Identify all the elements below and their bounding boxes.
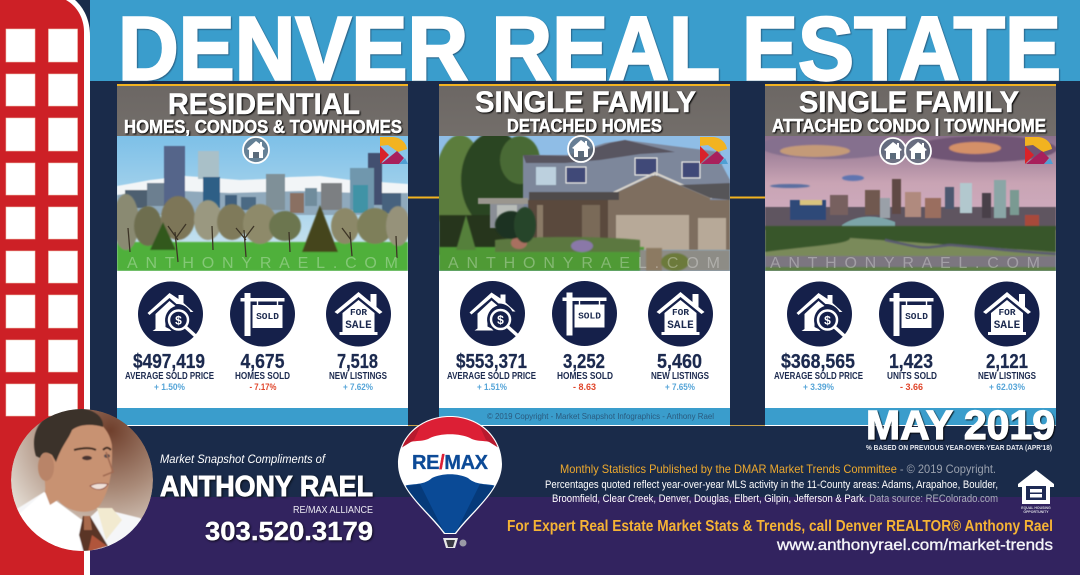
- icon: single house badge: [568, 136, 594, 162]
- stat: average sold price: + 1.51%: [477, 382, 507, 392]
- panel 3 frame: [765, 84, 1056, 426]
- stat: new listings: 5,460: [657, 351, 702, 373]
- stat: homes sold: 4,675: [240, 351, 284, 373]
- stat: new listings: FOR: [350, 307, 367, 318]
- panel 1 heading: [124, 88, 402, 137]
- panel 1 heading: HOMES, CONDOS & TOWNHOMES: [124, 117, 402, 137]
- watermark: ANTHONYRAEL.COM: [448, 255, 720, 272]
- stat: new listings: [648, 282, 713, 392]
- panel 1 frame: [117, 84, 408, 426]
- stat: average sold price: [774, 282, 863, 392]
- portrait photo: [11, 408, 155, 560]
- icon: DMAR logo: [700, 137, 728, 164]
- icon: single house badge: [243, 137, 269, 163]
- stat: average sold price: $: [175, 314, 182, 328]
- copyright line: © 2019 Copyright - Market Snapshot Infographics - Anthony Rael: [487, 411, 714, 421]
- stat: new listings: NEW LISTINGS: [978, 371, 1036, 382]
- stat: new listings: [326, 282, 391, 392]
- stat: average sold price: $497,419: [133, 351, 205, 373]
- watermark: ANTHONYRAEL.COM: [770, 255, 1040, 272]
- panel 2 frame: [439, 84, 730, 426]
- stat: homes sold: SOLD: [578, 310, 601, 322]
- stat: homes sold: HOMES SOLD: [235, 371, 290, 382]
- stat: average sold price: AVERAGE SOLD PRICE: [774, 371, 863, 382]
- stat: units sold: - 3.66: [900, 382, 923, 392]
- icon: DMAR logo: [380, 137, 408, 164]
- stat: average sold price: + 3.39%: [803, 382, 834, 392]
- stat: new listings: FOR: [672, 307, 689, 318]
- panel 2 heading: SINGLE FAMILY: [475, 86, 696, 119]
- stat: average sold price: $368,565: [781, 351, 855, 373]
- stat: new listings: FOR: [998, 307, 1016, 318]
- watermark: ANTHONYRAEL.COM: [127, 255, 398, 272]
- icon: equal housing opportunity: OPPORTUNITY: [1023, 510, 1049, 514]
- stat: homes sold: [552, 281, 617, 392]
- stat: homes sold: SOLD: [256, 311, 279, 322]
- stat: average sold price: AVERAGE SOLD PRICE: [447, 371, 536, 382]
- stat: average sold price: + 1.50%: [154, 382, 185, 392]
- RE/MAX balloon logo: RE/MAX: [412, 452, 489, 474]
- stat: new listings: 7,518: [337, 351, 378, 373]
- panel 3 heading: ATTACHED CONDO | TOWNHOME: [772, 116, 1046, 136]
- stat: new listings: NEW LISTINGS: [651, 371, 709, 382]
- statistics source note: Percentages quoted reflect year-over-year MLS activity in the 11-County areas: Adams, Arapahoe, Boulder,: [545, 479, 998, 491]
- statistics source note: Monthly Statistics Published by the DMAR Market Trends Committee - © 2019 Copyright.: [560, 462, 996, 476]
- panel 2 heading: DETACHED HOMES: [507, 116, 662, 136]
- statistics source note: [545, 462, 998, 505]
- building graphic on the left edge: [0, 0, 90, 575]
- stat: average sold price: [447, 281, 536, 392]
- agent brokerage: RE/MAX ALLIANCE: [293, 505, 373, 516]
- stat: homes sold: - 8.63: [573, 382, 596, 392]
- panel: single family attached: [760, 84, 1057, 426]
- icon: equal housing opportunity: [1018, 470, 1054, 514]
- date footnote: % BASED ON PREVIOUS YEAR-OVER-YEAR DATA (APR'18): [866, 443, 1052, 452]
- agent phone: 303.520.3179: [205, 516, 373, 546]
- stat: average sold price: $553,371: [456, 351, 527, 373]
- icon: equal housing opportunity: EQUAL HOUSING: [1021, 506, 1051, 510]
- stat: average sold price: AVERAGE SOLD PRICE: [125, 371, 214, 382]
- statistics source note: Broomfield, Clear Creek, Denver, Douglas, Elbert, Gilpin, Jefferson & Park. Data source: REColorado.com: [552, 493, 998, 505]
- RE/MAX balloon logo: [396, 416, 504, 548]
- stat: homes sold: HOMES SOLD: [557, 371, 613, 382]
- stat: new listings: NEW LISTINGS: [329, 371, 387, 382]
- stat: units sold: 1,423: [889, 351, 933, 373]
- stat: new listings: 2,121: [986, 351, 1028, 373]
- date heading: MAY 2019: [866, 402, 1055, 448]
- gold connector lines between panels: [408, 196, 765, 198]
- stat: homes sold: [230, 282, 295, 392]
- icon: double house badge: [880, 138, 931, 164]
- stat: new listings: [974, 282, 1040, 392]
- photo: Denver skyline at sunset: [760, 133, 1057, 271]
- stat: new listings: + 7.65%: [665, 382, 695, 392]
- panel: single family detached: [434, 84, 730, 426]
- photo: Denver skyline over park: [113, 136, 410, 271]
- stat: average sold price: $: [497, 313, 504, 327]
- agent attribution text: Market Snapshot Compliments of: [160, 454, 327, 466]
- panel 3 heading: [772, 86, 1046, 136]
- stat: homes sold: 3,252: [563, 351, 605, 373]
- stat: new listings: SALE: [667, 320, 694, 332]
- photo: two-storey house: [434, 132, 730, 271]
- panel 2 heading: [475, 86, 696, 136]
- stat: average sold price: $: [824, 314, 831, 328]
- website: www.anthonyrael.com/market-trends: [776, 537, 1053, 554]
- background: navy middle band: [90, 81, 1080, 498]
- stat: new listings: SALE: [994, 320, 1021, 332]
- stat: new listings: + 62.03%: [989, 382, 1025, 392]
- background: top blue band: [90, 0, 1080, 81]
- panel: residential: [113, 84, 410, 426]
- stat: new listings: SALE: [345, 320, 372, 332]
- stat: new listings: + 7.62%: [343, 382, 373, 392]
- gold rule above footer: [117, 425, 1056, 426]
- stat: units sold: [879, 282, 944, 392]
- icon: DMAR logo: [1025, 137, 1053, 164]
- stat: homes sold: - 7.17%: [250, 382, 276, 392]
- panel 3 heading: SINGLE FAMILY: [799, 86, 1019, 119]
- panel 1 heading: RESIDENTIAL: [168, 88, 360, 121]
- stat: units sold: SOLD: [905, 311, 928, 322]
- stat: average sold price: [125, 282, 214, 392]
- background: purple footer band: [90, 497, 1080, 575]
- stat: units sold: UNITS SOLD: [887, 371, 937, 382]
- agent name: ANTHONY RAEL: [160, 471, 373, 503]
